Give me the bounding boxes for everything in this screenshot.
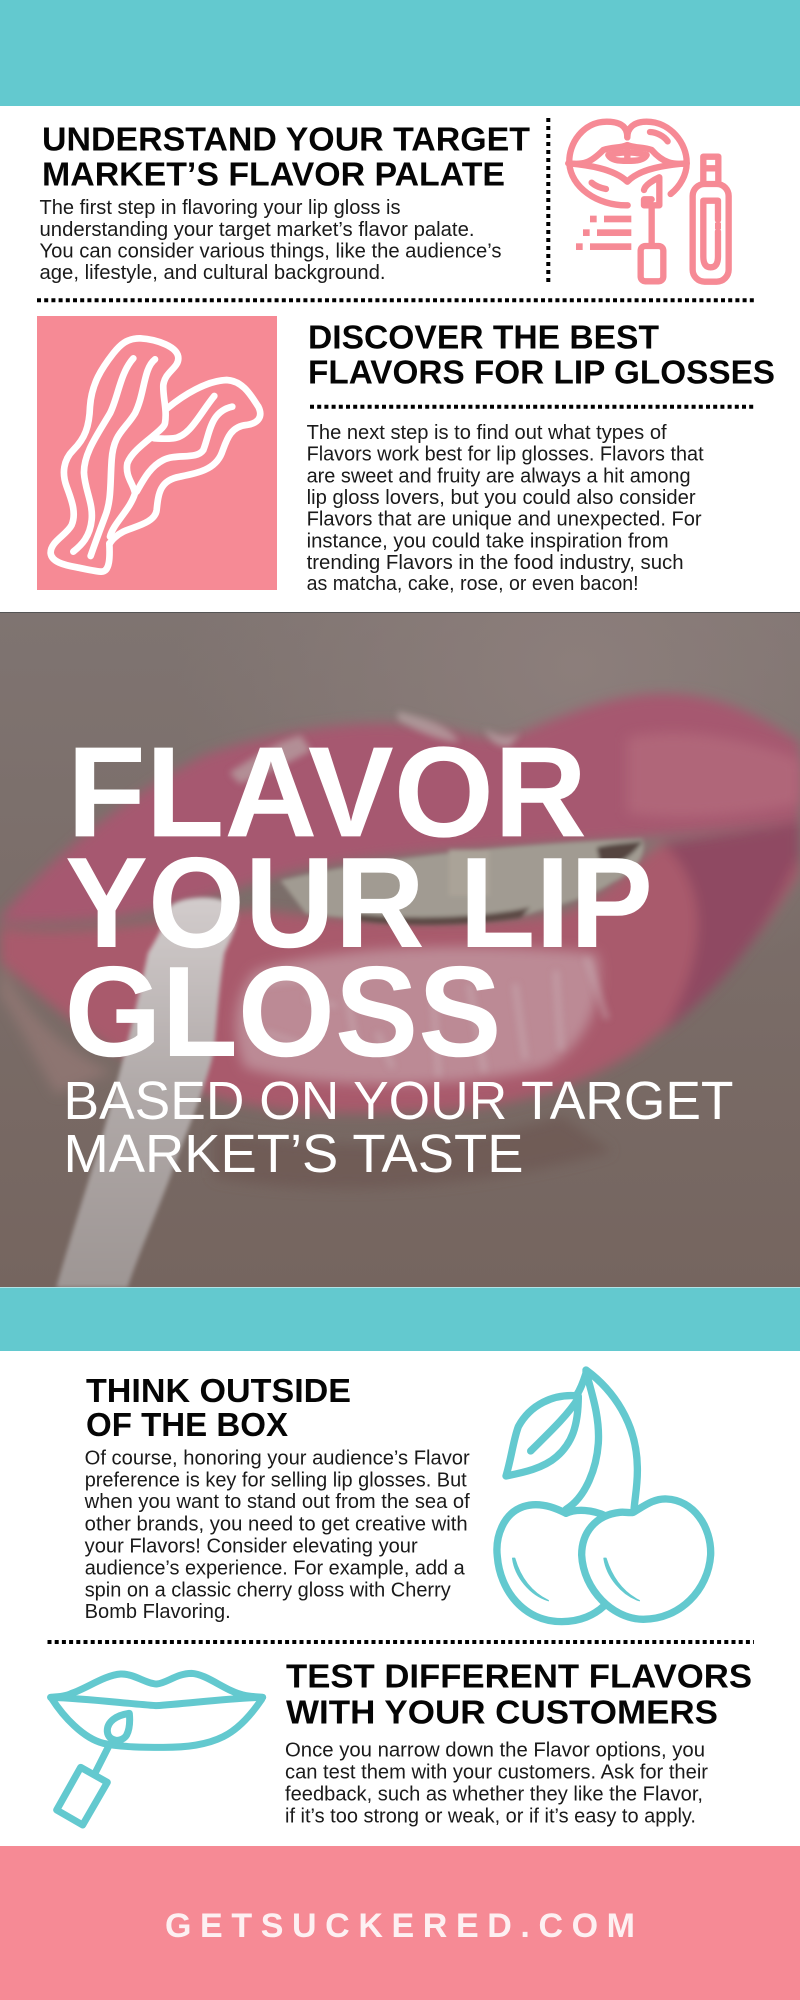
text block: next step: as matcha, cake, rose, or even bacon! — [307, 573, 639, 595]
section: understand your target market — [40, 118, 729, 284]
heading: test different flavors: TEST DIFFERENT FLAVORS — [286, 1659, 752, 1696]
heading: discover the best flavors: DISCOVER THE BEST — [308, 319, 660, 356]
heading: think outside of the box — [86, 1373, 351, 1444]
text block: of course: Of course, honoring your audience’s Flavor — [85, 1447, 470, 1469]
text block: first step — [40, 197, 502, 284]
text block: next step: Flavors work best for lip glosses. Flavors that — [307, 444, 704, 466]
top teal band — [0, 0, 800, 106]
text block: narrow down — [285, 1739, 708, 1828]
footer: pink band with site name — [0, 1846, 800, 2000]
text block: first step: age, lifestyle, and cultural background. — [40, 262, 386, 284]
heading: think outside of the box: OF THE BOX — [86, 1407, 289, 1444]
icon: lips with applicator — [51, 1673, 263, 1825]
hero photo: blurred lips — [0, 612, 800, 1288]
subtitle: based on your target market's taste: BASED ON YOUR TARGET — [64, 1072, 734, 1131]
text block: first step: You can consider various things, like the audience’s — [40, 240, 502, 262]
text block: of course: Bomb Flavoring. — [85, 1601, 231, 1623]
text block: of course: preference is key for selling lip glosses. But — [85, 1469, 467, 1491]
text block: first step: The first step in flavoring your lip gloss is — [40, 197, 400, 219]
icon: lips with gloss wand and tube — [568, 122, 729, 282]
text block: next step: The next step is to find out what types of — [307, 422, 667, 444]
middle teal band — [0, 1288, 800, 1351]
heading: understand your target market: MARKET’S FLAVOR PALATE — [42, 157, 505, 194]
text block: of course — [84, 1447, 470, 1623]
text block: next step: Flavors that are unique and unexpected. For — [307, 509, 702, 531]
text block: of course: other brands, you need to get creative with — [85, 1514, 468, 1536]
text block: narrow down: can test them with your customers. Ask for their — [285, 1761, 708, 1783]
text block: of course: your Flavors! Consider elevating your — [85, 1535, 418, 1557]
heading: think outside of the box: THINK OUTSIDE — [86, 1373, 351, 1410]
footer: pink band with site name: GETSUCKERED.COM — [165, 1907, 635, 1945]
panel: bacon icon tile — [37, 316, 277, 590]
text block: narrow down: Once you narrow down the Flavor options, you — [285, 1739, 705, 1761]
heading: understand your target market — [42, 122, 531, 194]
text block: first step: understanding your target market’s flavor palate. — [40, 219, 474, 241]
title: flavor your lip gloss: GLOSS — [64, 940, 502, 1084]
heading: discover the best flavors — [308, 319, 775, 391]
text block: of course: when you want to stand out from the sea of — [84, 1491, 470, 1513]
subtitle: based on your target market's taste: MARKET’S TASTE — [64, 1125, 524, 1184]
section: discover the best flavors — [37, 316, 775, 595]
text block: narrow down: if it’s too strong or weak, or if it’s easy to apply. — [285, 1806, 696, 1828]
text block: narrow down: feedback, such as whether they like the Flavor, — [285, 1783, 703, 1805]
title: flavor your lip gloss: YOUR LIP — [65, 831, 653, 975]
text block: next step — [307, 422, 704, 595]
subtitle: based on your target market's taste — [64, 1072, 734, 1184]
icon: cherries — [497, 1370, 711, 1622]
title: flavor your lip gloss: FLAVOR — [67, 720, 587, 864]
text block: next step: trending Flavors in the food industry, such — [307, 552, 684, 574]
text block: of course: audience’s experience. For example, add a — [85, 1557, 466, 1579]
text block: next step: instance, you could take inspiration from — [307, 530, 669, 552]
text block: next step: are sweet and fruity are always a hit among — [307, 465, 691, 487]
title: flavor your lip gloss — [64, 720, 653, 1084]
text block: of course: spin on a classic cherry gloss with Cherry — [85, 1579, 451, 1601]
section: test different flavors — [51, 1659, 752, 1828]
hero: lips photo background with title — [0, 612, 800, 1288]
heading: understand your target market: UNDERSTAND YOUR TARGET — [42, 122, 531, 159]
section: think outside of the box — [84, 1370, 711, 1623]
heading: test different flavors — [286, 1659, 752, 1732]
heading: discover the best flavors: FLAVORS FOR LIP GLOSSES — [308, 354, 775, 391]
text block: next step: lip gloss lovers, but you could also consider — [307, 487, 696, 509]
heading: test different flavors: WITH YOUR CUSTOMERS — [286, 1695, 718, 1732]
